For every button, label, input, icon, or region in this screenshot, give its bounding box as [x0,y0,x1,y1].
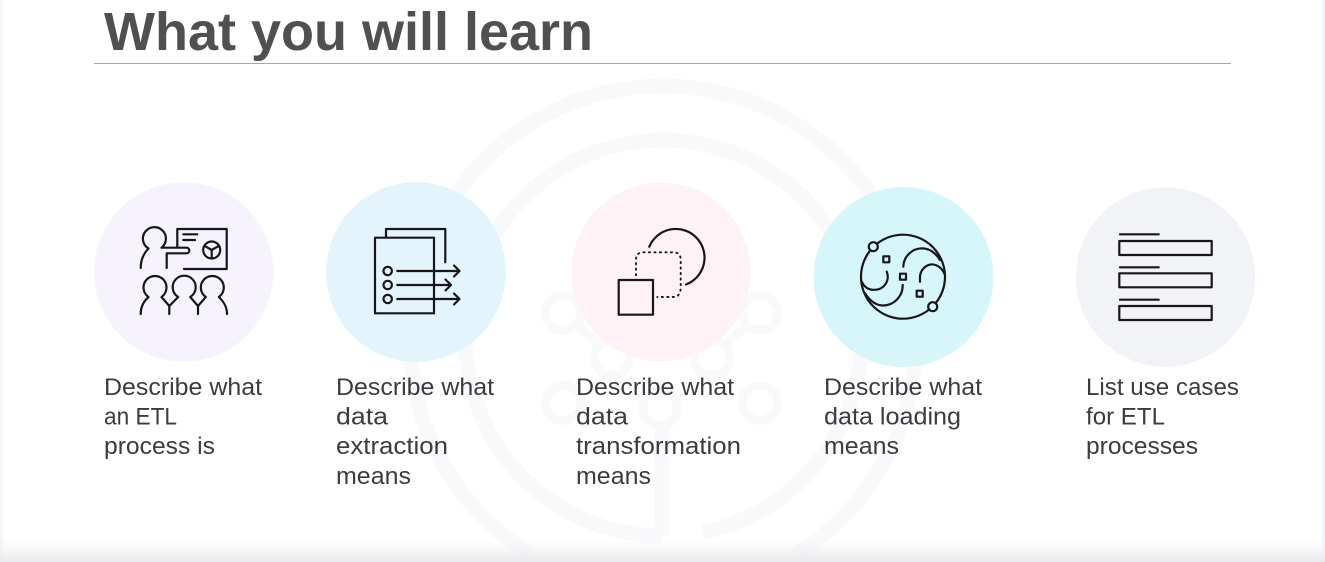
icon circle: light blue [326,182,506,362]
panel: ETL use cases [1076,187,1255,460]
bottom fade [0,540,1325,562]
label: for ETL [1086,404,1165,430]
panel: data transformation [572,182,750,490]
label: transformation [576,433,741,460]
label: data [576,404,629,430]
icon circle: cyan [814,187,994,367]
label: Describe what [104,374,262,401]
label: Describe what [336,374,494,401]
label: extraction [336,433,448,460]
title: What you will learn [104,2,593,62]
background watermark: circuit tree rings [410,86,916,555]
icon circle: lavender [94,182,273,362]
panel: data loading [814,187,994,460]
label: means [824,433,899,460]
label: an ETL [104,404,177,430]
label: means [336,463,411,490]
icon: square morphing into circle [619,229,705,315]
icon circle: pink [572,182,750,362]
icon: presenter and audience [141,227,227,314]
icon: document with arrows [375,229,460,313]
icon: globe with nodes and curves [861,235,945,319]
panel: ETL process [94,182,273,460]
label: data [336,404,389,430]
icon circle: grey [1076,187,1255,367]
right edge strip [1322,0,1325,562]
left edge strip [0,0,3,562]
icon: list of bars [1119,234,1212,320]
label: processes [1086,433,1198,460]
label: List use cases [1086,374,1239,401]
label: Describe what [824,374,982,401]
label: process is [104,433,215,460]
label: means [576,463,651,490]
title underline [94,63,1231,64]
label: Describe what [576,374,734,401]
label: data loading [824,404,961,430]
panel: data extraction [326,182,506,490]
